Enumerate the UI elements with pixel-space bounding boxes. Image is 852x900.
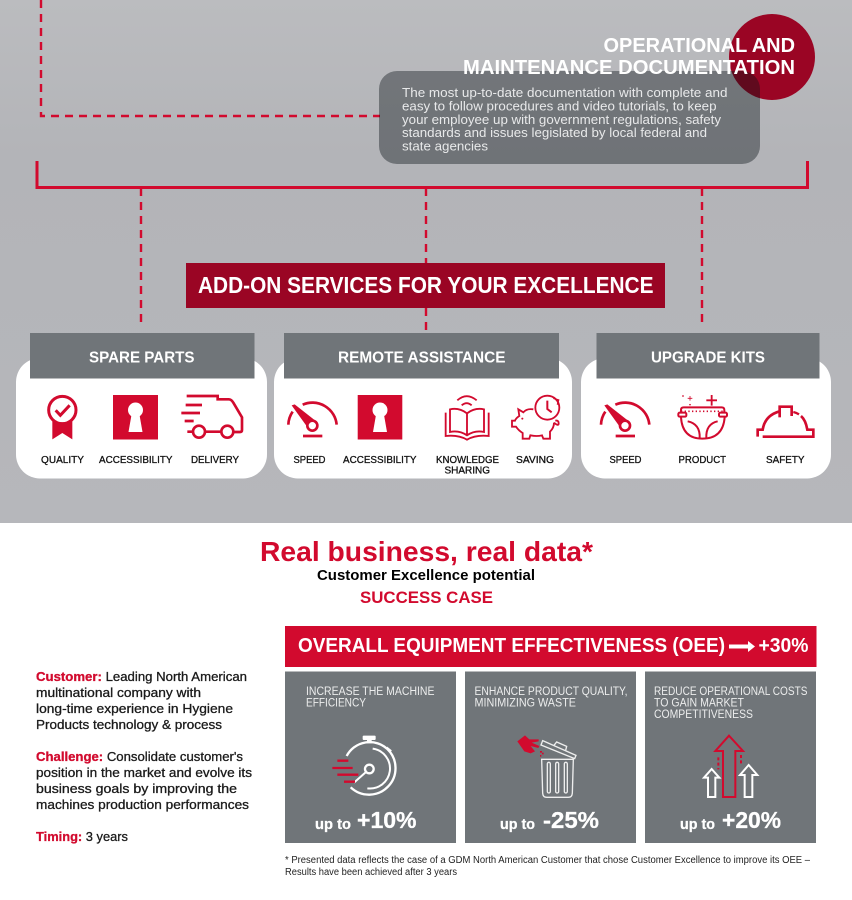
footnote (285, 855, 810, 878)
footnote: Results have been achieved after 3 years (285, 867, 457, 878)
description text: The most up-to-date documentation with complete and (402, 85, 728, 100)
labels (610, 454, 804, 466)
icon: piggy bank saving (512, 396, 559, 439)
add-on services banner: ADD-ON SERVICES FOR YOUR EXCELLENCE (198, 272, 654, 298)
panel: upgrade kits (581, 333, 831, 478)
card: operational costs (645, 672, 816, 843)
icon: safety helmet (758, 407, 813, 437)
customer case text block: multinational company with (36, 685, 201, 700)
remote assistance header (284, 333, 559, 378)
decorative red circle (729, 14, 815, 100)
description box (379, 71, 760, 164)
customer case text block: position in the market and evolve its (36, 765, 253, 780)
icon: delivery truck (181, 396, 242, 438)
card: machine efficiency (285, 672, 456, 843)
customer case text block: business goals by improving the (36, 781, 237, 796)
customer case text block: long-time experience in Hygiene (36, 701, 233, 716)
description text (402, 85, 728, 154)
description text: state agencies (402, 138, 489, 154)
labels: KNOWLEDGE (436, 454, 499, 466)
icon: speed gauge (601, 403, 649, 436)
add-on services banner (186, 263, 665, 308)
labels: ACCESSIBILITY (343, 454, 416, 466)
icon: trash can (517, 735, 576, 797)
bracket connector (37, 161, 808, 188)
upgrade kits header (596, 333, 820, 378)
labels: SPEED (610, 454, 642, 466)
icon: accessibility (358, 395, 402, 440)
panel: remote assistance (274, 333, 572, 478)
labels: QUALITY (41, 454, 84, 466)
labels: DELIVERY (191, 454, 239, 466)
heading: MAINTENANCE DOCUMENTATION (463, 57, 795, 79)
labels: PRODUCT (678, 454, 727, 466)
customer case text block: Products technology & process (36, 717, 223, 732)
result: +20% (722, 807, 781, 833)
result: up to (680, 816, 715, 833)
labels (41, 454, 239, 466)
card: product quality: ENHANCE PRODUCT QUALITY, (474, 686, 628, 698)
card: product quality: MINIMIZING WASTE (474, 698, 576, 710)
section title: Real business, real data* (260, 536, 593, 567)
result (315, 807, 416, 833)
card: machine efficiency: INCREASE THE MACHINE (306, 686, 435, 698)
customer case text block: machines production performances (36, 797, 250, 812)
arrow (729, 641, 755, 652)
labels: SAFETY (766, 454, 804, 466)
result (680, 807, 781, 833)
panel: spare parts (16, 333, 267, 478)
card: product quality (465, 672, 636, 843)
icon: quality (49, 396, 76, 439)
result: up to (315, 816, 351, 833)
panel: operational and maintenance documentation (379, 14, 815, 164)
result (500, 807, 599, 833)
OEE banner (285, 626, 816, 667)
dashed connectors to add-on services (141, 188, 702, 333)
heading (463, 35, 795, 79)
labels: SAVING (516, 454, 554, 466)
customer case text block: Customer: Leading North American (36, 669, 247, 684)
spare parts header: SPARE PARTS (89, 350, 195, 366)
OEE banner: OVERALL EQUIPMENT EFFECTIVENESS (OEE) (298, 634, 725, 657)
icon: product diaper (678, 395, 727, 439)
description text: your employee up with government regulations, safety (402, 112, 722, 127)
icon: speed gauge (288, 403, 337, 436)
description text: easy to follow procedures and video tutorials, to keep (402, 98, 716, 114)
card: operational costs: REDUCE OPERATIONAL COSTS (654, 686, 808, 698)
upgrade kits header: UPGRADE KITS (651, 350, 765, 366)
result: -25% (543, 807, 599, 833)
icon: growth arrows (704, 736, 757, 797)
description text: standards and issues legislated by local federal and (402, 125, 707, 140)
labels: ACCESSIBILITY (99, 454, 172, 466)
dashed connector from previous section (41, 0, 380, 116)
spare parts header (30, 333, 254, 378)
customer case text block: Challenge: Consolidate customer's (36, 749, 243, 764)
success case heading: SUCCESS CASE (360, 588, 493, 607)
card: operational costs: TO GAIN MARKET (654, 698, 744, 710)
result: up to (500, 816, 535, 833)
icon: stopwatch (332, 736, 396, 795)
labels: SPEED (294, 454, 326, 466)
labels: SHARING (444, 464, 490, 476)
gray background section (0, 0, 852, 523)
labels (294, 454, 554, 476)
OEE banner: +30% (758, 634, 808, 657)
footnote: * Presented data reflects the case of a GDM North American Customer that chose Customer Excellence to improve its OEE – (285, 855, 810, 866)
icon: knowledge book (446, 396, 489, 440)
customer case text block: Timing: 3 years (36, 829, 128, 844)
card: machine efficiency: EFFICIENCY (306, 698, 366, 710)
customer case text block (36, 669, 253, 844)
card: operational costs: COMPETITIVENESS (654, 709, 753, 721)
remote assistance header: REMOTE ASSISTANCE (338, 350, 506, 366)
icon: accessibility (113, 395, 158, 440)
section subtitle: Customer Excellence potential (317, 568, 535, 584)
result: +10% (357, 807, 416, 833)
heading: OPERATIONAL AND (604, 35, 795, 57)
